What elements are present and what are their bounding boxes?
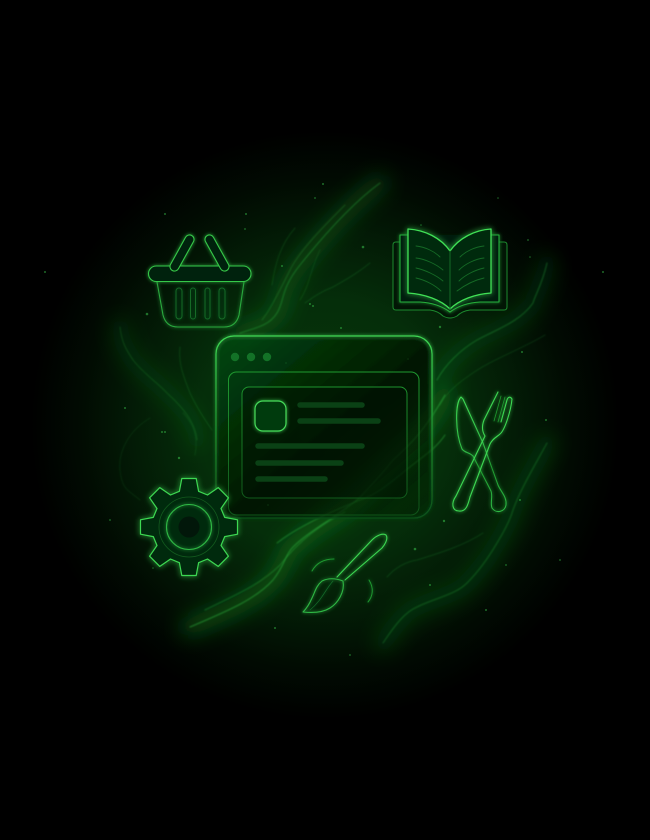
icon: knife and fork: [453, 392, 512, 512]
brush bristles: [303, 579, 343, 613]
icon: gear: [140, 478, 238, 576]
page text lines: [416, 246, 484, 291]
flowing smoke wisps: [120, 183, 547, 643]
icon: open book: [393, 229, 507, 318]
fork tines: [494, 396, 505, 422]
motion swoosh right: [368, 580, 372, 602]
gear thin ring: [159, 497, 219, 557]
icon: shopping basket: [148, 233, 251, 327]
knife: [457, 397, 506, 512]
window control dots: [231, 353, 271, 361]
front pages: [408, 229, 491, 309]
thumbnail square: [255, 401, 286, 431]
motion swoosh left: [312, 559, 334, 571]
icon: paint brush: [303, 534, 387, 613]
fork outline: [453, 392, 512, 511]
gear outline: [140, 478, 238, 576]
content panel: [242, 387, 407, 498]
book spine: [449, 251, 451, 309]
bristle detail: [310, 581, 333, 610]
panel: browser window: [216, 336, 432, 518]
window frame: [216, 336, 432, 518]
gear hub ring: [166, 504, 212, 550]
background glow: [30, 130, 620, 720]
gear centre hole: [178, 516, 200, 538]
particle specks: [44, 183, 604, 656]
brush handle: [337, 534, 387, 580]
back cover: [393, 242, 507, 318]
middle pages: [400, 235, 499, 312]
text lines: [258, 405, 378, 479]
inner window frame: [228, 372, 419, 515]
